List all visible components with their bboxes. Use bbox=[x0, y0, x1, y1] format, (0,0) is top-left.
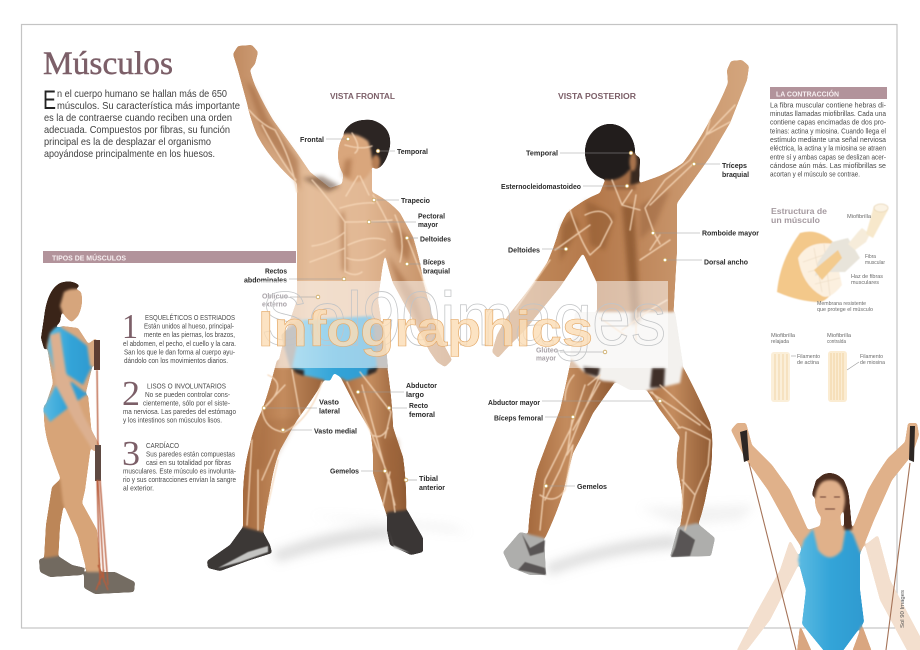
myofibril relaxed: relajada bbox=[771, 339, 789, 345]
label: biceps braquial: braquial bbox=[423, 266, 450, 276]
label: tibial anterior: anterior bbox=[419, 483, 445, 492]
structure labels: que protege el músculo bbox=[817, 307, 873, 313]
title: Músculos bbox=[43, 46, 173, 82]
muscle type 3: cardiaco: al exterior. bbox=[123, 484, 154, 492]
back body silhouette bbox=[492, 60, 749, 575]
label: oblicuo externo: Oblicuo bbox=[262, 292, 288, 300]
label: deltoides: Deltoides bbox=[420, 234, 451, 244]
structure title: un músculo bbox=[771, 215, 820, 225]
intro text block: apoyándose principalmente en los huesos. bbox=[44, 149, 215, 160]
contraction text block: acortan y el músculo se contrae. bbox=[770, 170, 860, 179]
muscle type 3: cardiaco: Sus paredes están compuestas bbox=[146, 450, 235, 458]
label: biceps femoral bbox=[494, 414, 575, 422]
structure labels: Miofibrilla bbox=[847, 214, 871, 220]
label: tibial anterior bbox=[404, 474, 445, 492]
label: recto femoral: femoral bbox=[409, 410, 435, 419]
label: oblicuo externo: externo bbox=[262, 300, 287, 308]
label: pectoral mayor: Pectoral bbox=[418, 212, 445, 220]
muscle type 2: lisos: cientemente, sólo por el siste- bbox=[143, 398, 231, 408]
muscle type 1: esqueleticos: Están unidos al hueso, principal- bbox=[144, 322, 234, 330]
intro text block: es la de contraerse cuando reciben una orden bbox=[44, 113, 232, 124]
label: deltoides back bbox=[508, 246, 568, 254]
section heading: tipos de musculos: TIPOS DE MÚSCULOS bbox=[52, 254, 126, 262]
label: abductor largo bbox=[356, 381, 437, 399]
muscle type 3: cardiaco: casi en su totalidad por fibras bbox=[146, 458, 231, 467]
myofibril relaxed: Filamento bbox=[797, 354, 820, 360]
label: deltoides back: Deltoides bbox=[508, 246, 540, 254]
label: triceps braquial: braquial bbox=[722, 170, 749, 179]
myofibril relaxed bbox=[771, 333, 820, 402]
label: pectoral mayor bbox=[367, 212, 445, 229]
contraction text block: La fibra muscular contiene hebras di- bbox=[770, 100, 887, 110]
label: trapecio bbox=[372, 196, 430, 205]
label: rectos abdominales: abdominales bbox=[244, 276, 287, 284]
muscle type 1: esqueleticos bbox=[122, 307, 236, 365]
muscle type 2: lisos: No se pueden controlar cons- bbox=[145, 390, 230, 399]
intro text block bbox=[43, 85, 240, 160]
myofibril relaxed: Miofibrilla bbox=[771, 333, 795, 339]
structure labels: Fibra bbox=[865, 254, 876, 260]
label: rectos abdominales: Rectos bbox=[265, 266, 287, 276]
myofibril relaxed: de actina bbox=[797, 360, 819, 366]
contraction text block: contiene capas encimadas de dos pro- bbox=[770, 118, 887, 127]
label: abductor mayor bbox=[488, 398, 662, 407]
section heading: tipos de musculos bbox=[43, 251, 296, 263]
structure title: Estructura de bbox=[771, 206, 827, 216]
back muscle contour lines bbox=[515, 105, 735, 530]
figure: woman front pose with resistance band bbox=[731, 423, 920, 650]
label: recto femoral bbox=[387, 401, 435, 419]
contraction text block: teínas: actina y miosina. Cuando llega el bbox=[770, 126, 886, 135]
structure labels: Membrana resistente bbox=[817, 301, 866, 307]
muscle type 1: esqueleticos: San los que le dan forma al cuerpo ayu- bbox=[124, 348, 235, 356]
label: temporal: Temporal bbox=[397, 147, 428, 156]
section heading: la contraccion: LA CONTRACCIÓN bbox=[776, 90, 839, 98]
back body shading bbox=[560, 190, 670, 325]
myofibril bbox=[848, 228, 870, 250]
label: recto femoral: Recto bbox=[409, 401, 428, 410]
label: dorsal ancho: Dorsal ancho bbox=[704, 258, 748, 266]
front body shading bbox=[246, 80, 428, 500]
myofibril contracted bbox=[827, 333, 885, 402]
figure: male front view bbox=[207, 45, 452, 571]
muscle type 3: cardiaco: CARDÍACO bbox=[146, 441, 179, 450]
fibre bundle bbox=[815, 238, 860, 276]
label: gemelos bbox=[330, 466, 387, 476]
structure labels: muscular bbox=[865, 260, 885, 266]
structure labels: musculares bbox=[851, 280, 879, 286]
label: gemelos back: Gemelos bbox=[577, 482, 607, 491]
back shoe details bbox=[518, 529, 695, 575]
intro text block: n el cuerpo humano se hallan más de 650 bbox=[57, 89, 227, 100]
face features bbox=[820, 497, 840, 509]
structure title bbox=[771, 206, 827, 225]
section heading: la contraccion bbox=[770, 87, 887, 99]
muscle bundle section bbox=[798, 243, 842, 297]
band handle lower bbox=[95, 445, 101, 481]
label: temporal back bbox=[526, 148, 633, 158]
muscle contour lines bbox=[247, 110, 430, 530]
label: gluteo mayor bbox=[536, 346, 607, 362]
muscle type 2: lisos bbox=[122, 374, 236, 424]
muscle type 1: esqueleticos: el abdomen, el pecho, el cuello y la cara. bbox=[123, 339, 236, 348]
band handles bbox=[740, 426, 915, 462]
label: temporal back: Temporal bbox=[526, 148, 558, 158]
watermark: translucent band bbox=[258, 281, 668, 368]
label: deltoides bbox=[405, 234, 451, 244]
label: tibial anterior: Tibial bbox=[419, 474, 438, 483]
muscle type 1: esqueleticos: mente en las piernas, los brazos, bbox=[144, 330, 235, 339]
contraction text block: eléctrica, la actina y la miosina se atraen bbox=[770, 144, 886, 153]
structure labels: Haz de fibras bbox=[851, 274, 883, 280]
heading: vista posterior: VISTA POSTERIOR bbox=[558, 91, 637, 101]
muscle type 3: cardiaco bbox=[122, 434, 237, 492]
label: vasto lateral: lateral bbox=[319, 406, 340, 416]
muscle type 1: esqueleticos: ESQUELÉTICOS O ESTRIADOS bbox=[145, 313, 235, 322]
label: romboide mayor: Romboide mayor bbox=[702, 228, 759, 238]
muscle type 3: cardiaco: 3 bbox=[122, 434, 140, 473]
floor shadows bbox=[272, 505, 755, 575]
label: frontal bbox=[300, 135, 350, 144]
muscle type 3: cardiaco: rio y sus contracciones envían la sangre bbox=[123, 475, 236, 484]
muscle type 1: esqueleticos: 1 bbox=[122, 307, 138, 346]
label: biceps femoral: Bíceps femoral bbox=[494, 414, 543, 422]
contraction text block bbox=[770, 100, 887, 179]
contraction text block: estímulo mediante una señal nerviosa bbox=[770, 135, 887, 144]
shoe details bbox=[218, 530, 410, 568]
labels: back view bbox=[488, 148, 759, 491]
label: biceps braquial: Bíceps bbox=[423, 258, 445, 266]
muscle type 2: lisos: 2 bbox=[122, 374, 140, 413]
structure labels bbox=[817, 214, 885, 313]
band handle upper bbox=[94, 340, 100, 370]
muscle structure illustration bbox=[777, 204, 888, 302]
watermark: outlined stock name: Sol90images bbox=[261, 277, 666, 362]
contraction text block: entre sí y ambas capas se deslizan acer- bbox=[770, 152, 886, 161]
figure: male back view bbox=[492, 60, 749, 575]
label: gluteo mayor: Glúteo bbox=[536, 346, 558, 354]
label: vasto lateral bbox=[262, 398, 340, 416]
label: vasto lateral: Vasto bbox=[319, 398, 339, 406]
label: gemelos: Gemelos bbox=[330, 466, 359, 476]
label: triceps braquial: Tríceps bbox=[722, 161, 747, 170]
intro text block: E bbox=[43, 85, 56, 115]
label: gluteo mayor: mayor bbox=[536, 354, 556, 362]
muscle type 3: cardiaco: musculares. Este músculo es involunta- bbox=[123, 466, 237, 476]
muscle type 1: esqueleticos: dándolo con los movimientos diarios. bbox=[124, 356, 228, 365]
side woman silhouette bbox=[39, 282, 135, 594]
credit: Sol 90 Images bbox=[900, 590, 906, 628]
myofibril contracted: de miosina bbox=[860, 360, 885, 366]
elastic bands bbox=[96, 370, 108, 590]
label: abductor largo: Abductor bbox=[406, 381, 437, 390]
label: triceps braquial bbox=[692, 161, 749, 179]
label: pectoral mayor: mayor bbox=[418, 220, 438, 229]
label: biceps braquial bbox=[405, 258, 450, 276]
label: vasto medial: Vasto medial bbox=[314, 426, 357, 436]
label: abductor largo: largo bbox=[406, 390, 424, 399]
label: esternocleidomastoideo bbox=[501, 182, 629, 191]
label: abductor mayor: Abductor mayor bbox=[488, 398, 540, 407]
labels: front view bbox=[244, 135, 451, 492]
label: gemelos back bbox=[544, 482, 607, 491]
intro text block: músculos. Su característica más importante bbox=[57, 101, 240, 112]
front woman silhouette bbox=[731, 423, 920, 650]
myofibril contracted: contraída bbox=[827, 339, 846, 345]
label: rectos abdominales bbox=[244, 266, 346, 284]
muscle type 2: lisos: ma nerviosa. Las paredes del estómago bbox=[123, 407, 236, 416]
heading: vista frontal: VISTA FRONTAL bbox=[330, 91, 395, 101]
label: vasto medial bbox=[281, 426, 357, 436]
intro text block: principal es la de desplazar el organismo bbox=[44, 137, 211, 148]
myofibril contracted: Miofibrilla bbox=[827, 333, 851, 339]
outer muscle sheath bbox=[777, 232, 840, 302]
front body silhouette bbox=[207, 45, 452, 571]
intro text block: adecuada. Compuestos por fibras, su función bbox=[44, 125, 230, 136]
figure: woman side pose with resistance band bbox=[39, 282, 135, 594]
myofibril contracted: Filamento bbox=[860, 354, 883, 360]
label: romboide mayor bbox=[651, 228, 759, 238]
label: frontal: Frontal bbox=[300, 135, 324, 144]
muscle type 2: lisos: LISOS O INVOLUNTARIOS bbox=[147, 382, 226, 390]
muscle type 2: lisos: y los intestinos son músculos lisos. bbox=[123, 416, 222, 424]
label: trapecio: Trapecio bbox=[401, 196, 430, 205]
contraction text block: minutas llamadas miofibrillas. Cada una bbox=[770, 109, 887, 118]
watermark: infographics word: Infographics bbox=[258, 301, 593, 357]
label: oblicuo externo bbox=[262, 292, 320, 308]
label: esternocleidomastoideo: Esternocleidomastoideo bbox=[501, 182, 581, 191]
label: dorsal ancho bbox=[663, 258, 748, 266]
elastic bands bbox=[749, 463, 910, 650]
label: temporal bbox=[376, 147, 428, 156]
contraction text block: cándose aún más. Las miofibrillas se bbox=[770, 161, 886, 170]
